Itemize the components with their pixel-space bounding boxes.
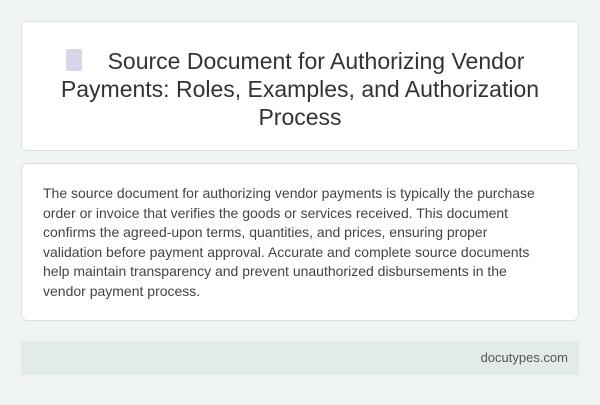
panel: title card — [21, 21, 579, 151]
footer text: docutypes.com — [481, 350, 568, 365]
text block: The source document for authorizing vendor payments is typically the purchase order or invoice that verifies the goods or services received. This document confirms the agreed-upon terms, quantities, and prices, ensuring proper validation before payment approval. Accurate and complete source documents help maintain transparency and prevent unauthorized disbursements in the vendor payment process. — [43, 185, 535, 298]
title: Source Document for Authorizing Vendor Payments: Roles, Examples, and Authorization Process — [61, 48, 539, 130]
icon: document — [66, 49, 82, 71]
panel: description — [21, 163, 579, 321]
footer — [21, 341, 579, 375]
